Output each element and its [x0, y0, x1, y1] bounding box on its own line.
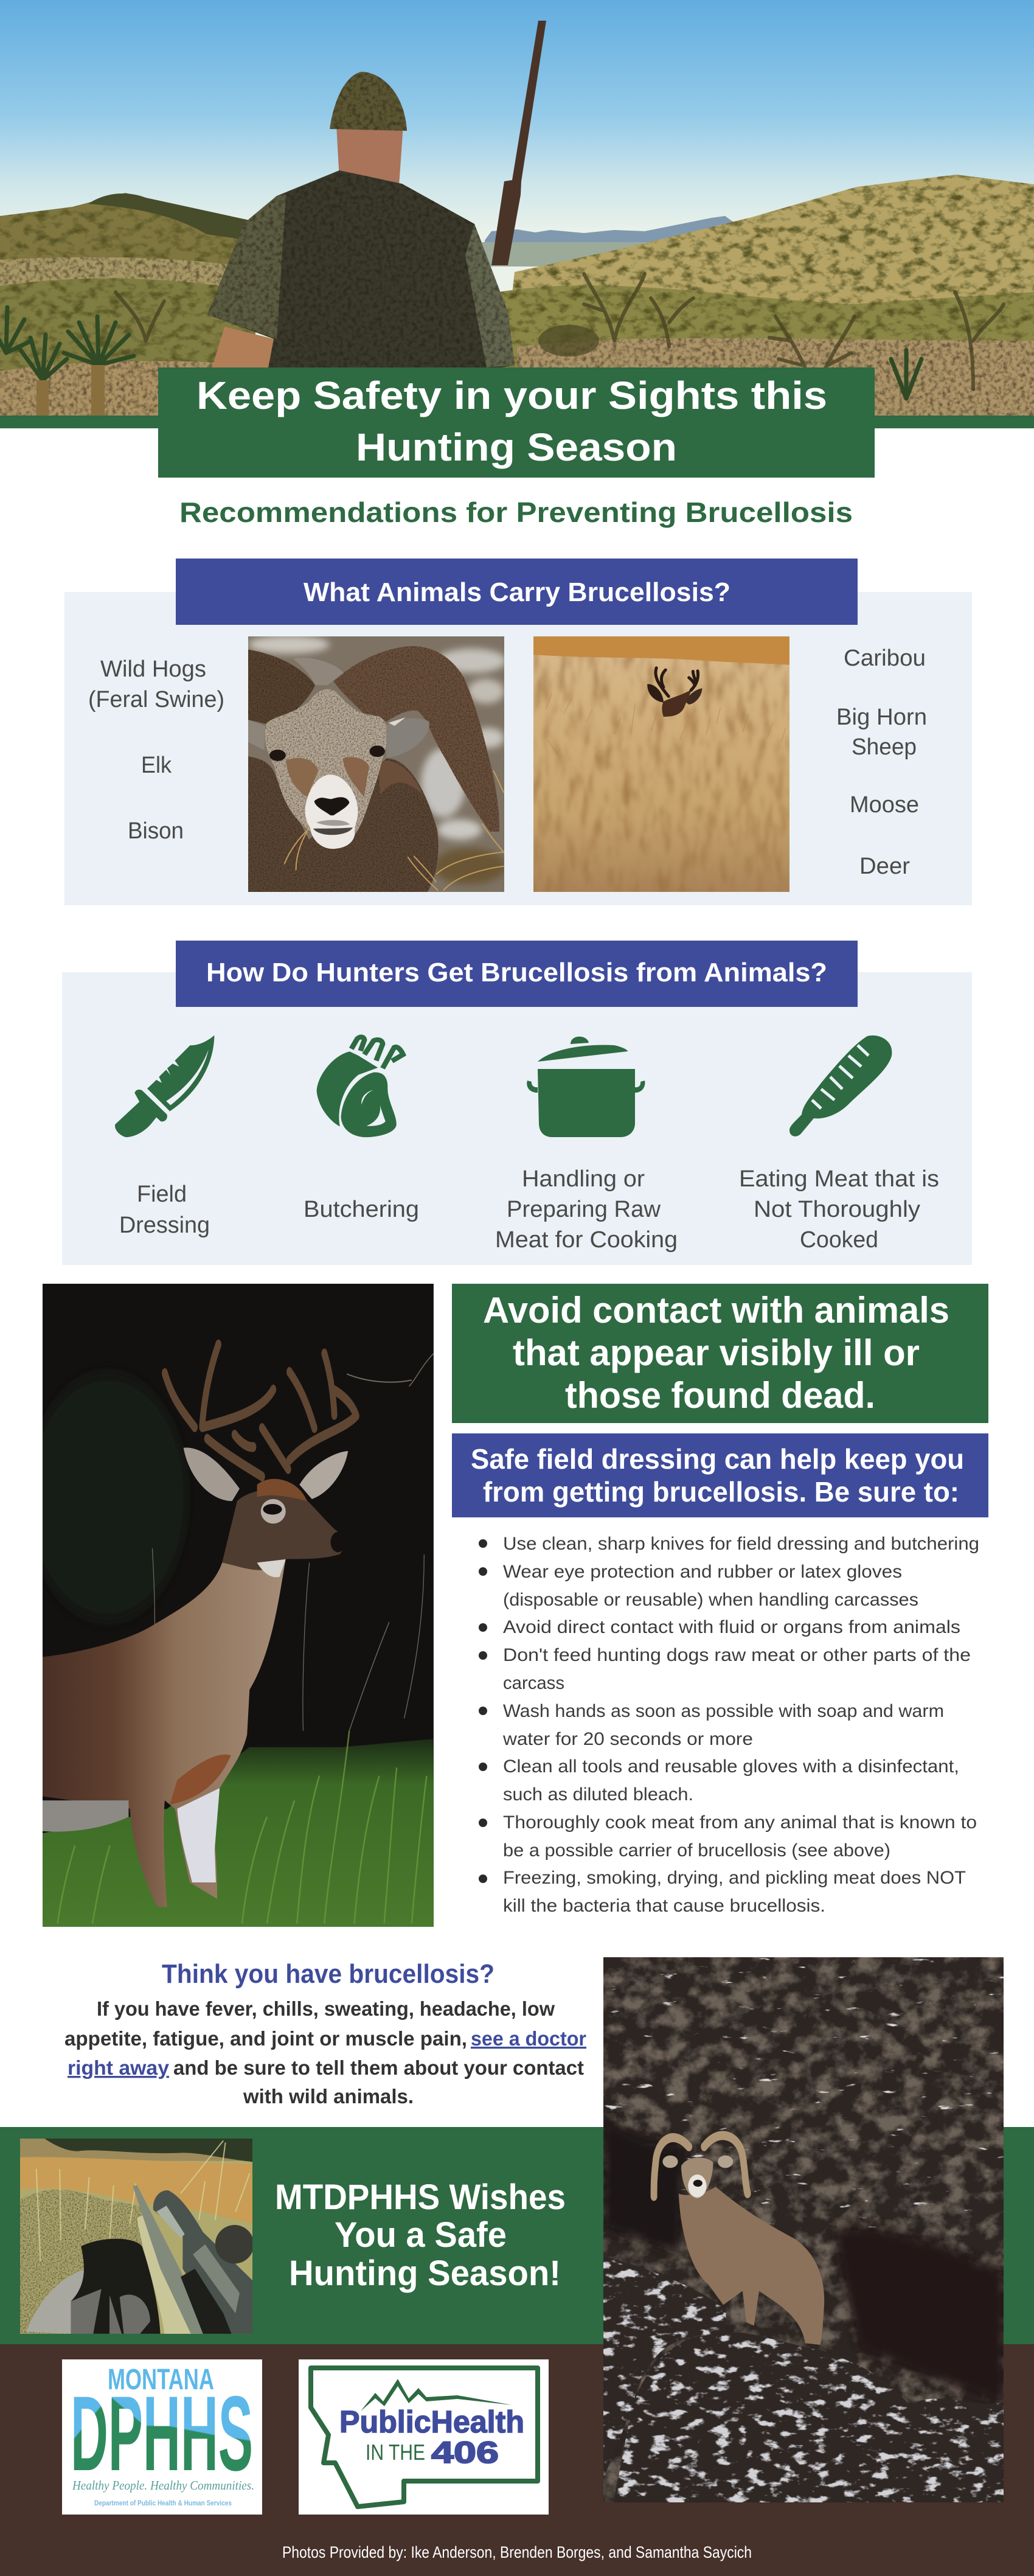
- label: eating undercooked meat: Cooked: [800, 1227, 878, 1253]
- logo: Public Health in the 406: IN THE: [366, 2440, 425, 2465]
- heading: what animals: [176, 559, 858, 625]
- text block: symptoms: [64, 1997, 586, 2108]
- heading: think you have brucellosis: Think you have brucellosis?: [162, 1959, 494, 1989]
- callout: avoid contact: [452, 1284, 988, 1423]
- title banner: Keep Safety in your Sights this: [196, 374, 827, 417]
- label: field dressing: [119, 1182, 210, 1238]
- bullet list: field dressing tips: Avoid direct contact with fluid or organs from animals: [503, 1617, 960, 1637]
- brown footer band: [0, 2344, 1034, 2576]
- callout: avoid contact: Avoid contact with animals: [483, 1290, 949, 1331]
- rifle: [491, 21, 546, 265]
- bullet list: field dressing tips: Don't feed hunting dogs raw meat or other parts of the: [503, 1645, 971, 1665]
- left animal list: [88, 656, 224, 844]
- bullet list: field dressing tips: water for 20 seconds or more: [502, 1729, 753, 1749]
- right animal list: Moose: [850, 792, 919, 818]
- callout: safe field dressing: [452, 1433, 988, 1517]
- left animal list: (Feral Swine): [88, 687, 224, 712]
- text: MTDPHHS wishes: Hunting Season!: [289, 2254, 561, 2293]
- green stripe: [0, 416, 1034, 428]
- photo: rifle and pack in field: [20, 2139, 254, 2334]
- bullet list: field dressing tips: Freezing, smoking, drying, and pickling meat does NOT: [503, 1868, 966, 1888]
- hunter figure: [207, 72, 515, 371]
- right animal list: Sheep: [852, 734, 917, 760]
- hero photo: hunter with rifle in desert hills: [0, 0, 1034, 416]
- logo: Public Health in the 406: [299, 2359, 549, 2515]
- label: handling raw meat: Preparing Raw: [507, 1197, 661, 1222]
- photo credits: Photos Provided by: Ike Anderson, Brenden Borges, and Samantha Saycich: [282, 2543, 752, 2561]
- text block: symptoms: with wild animals.: [243, 2085, 414, 2108]
- callout: avoid contact: that appear visibly ill or: [513, 1332, 920, 1373]
- text: MTDPHHS wishes: You a Safe: [335, 2215, 507, 2255]
- subtitle: Recommendations for Preventing Brucellosis: [179, 496, 853, 528]
- icon: cooking pot: [527, 1037, 645, 1137]
- right animal list: Deer: [859, 854, 910, 879]
- right animal list: Big Horn: [836, 705, 927, 730]
- right animal list: [836, 646, 927, 879]
- right animal list: Caribou: [844, 646, 926, 671]
- heading: what animals: What Animals Carry Brucellosis?: [304, 577, 730, 607]
- bullet list: field dressing tips: (disposable or reusable) when handling carcasses: [503, 1590, 918, 1610]
- logo: Montana DPHHS: Healthy People. Healthy Communities.: [72, 2478, 254, 2493]
- logo: Montana DPHHS: MONTANA: [108, 2364, 214, 2396]
- bullet list: field dressing tips: be a possible carrier of brucellosis (see above): [503, 1840, 890, 1861]
- bullet list: field dressing tips: [479, 1534, 979, 1916]
- left animal list: Bison: [128, 818, 184, 844]
- label: eating undercooked meat: Not Thoroughly: [754, 1197, 920, 1222]
- label: eating undercooked meat: Eating Meat that is: [739, 1166, 939, 1192]
- text block: symptoms: right away: [68, 2056, 170, 2079]
- bullet list: field dressing tips: Use clean, sharp knives for field dressing and butchering: [503, 1534, 979, 1554]
- text block: symptoms: appetite, fatigue, and joint or muscle pain,: [64, 2027, 467, 2050]
- bullet list: field dressing tips: kill the bacteria that cause brucellosis.: [503, 1896, 825, 1916]
- green band: [0, 2127, 1034, 2344]
- text block: symptoms: and be sure to tell them about your contact: [173, 2056, 584, 2079]
- text: MTDPHHS wishes: [275, 2177, 566, 2293]
- logo: Montana DPHHS: [62, 2359, 262, 2515]
- callout: safe field dressing: Safe field dressing can help keep you: [471, 1443, 964, 1475]
- bullet list: field dressing tips: Clean all tools and reusable gloves with a disinfectant,: [503, 1756, 959, 1777]
- logo: Montana DPHHS: Department of Public Health & Human Services: [94, 2499, 232, 2507]
- bullet list: field dressing tips: Thoroughly cook meat from any animal that is known to: [503, 1812, 977, 1833]
- label: eating undercooked meat: [739, 1166, 939, 1253]
- logo: Montana DPHHS: DPHHS: [71, 2375, 253, 2493]
- panel: what animals carry brucellosis: [64, 559, 972, 905]
- left animal list: Wild Hogs: [100, 656, 206, 682]
- photo: bighorn ram on snowy rocks: [603, 1957, 1004, 2502]
- label: handling raw meat: Meat for Cooking: [495, 1227, 678, 1253]
- logo: Public Health in the 406: 406: [431, 2435, 499, 2470]
- text: MTDPHHS wishes: MTDPHHS Wishes: [275, 2177, 566, 2217]
- bullet list: field dressing tips: Wash hands as soon as possible with soap and warm: [503, 1701, 944, 1721]
- text block: symptoms: see a doctor: [471, 2027, 586, 2050]
- title banner: [158, 367, 875, 478]
- label: handling raw meat: [495, 1166, 678, 1253]
- panel: how hunters get brucellosis: [62, 941, 972, 1265]
- label: field dressing: Dressing: [119, 1213, 210, 1238]
- callout: safe field dressing: from getting brucellosis. Be sure to:: [483, 1476, 959, 1508]
- icon: cut of meat: [317, 1037, 403, 1137]
- callout: avoid contact: those found dead.: [565, 1375, 875, 1416]
- heading: how hunters: How Do Hunters Get Brucellosis from Animals?: [206, 958, 827, 987]
- photo: deer antlers in wheat field: [533, 636, 789, 893]
- bullet list: field dressing tips: carcass: [503, 1673, 564, 1693]
- photo: white-tailed buck: [27, 1284, 434, 1927]
- icon: meat thermometer: [789, 1036, 892, 1137]
- heading: how hunters: [176, 941, 858, 1007]
- title banner: Hunting Season: [356, 425, 677, 469]
- text block: symptoms: If you have fever, chills, sweating, headache, low: [97, 1997, 555, 2020]
- bullet list: field dressing tips: Wear eye protection and rubber or latex gloves: [503, 1562, 902, 1582]
- logo: Public Health in the 406: PublicHealth: [339, 2404, 524, 2439]
- label: butchering: Butchering: [304, 1197, 419, 1222]
- bullet list: field dressing tips: such as diluted bleach.: [503, 1784, 693, 1805]
- label: field dressing: Field: [137, 1182, 187, 1207]
- icon: knife: [115, 1036, 214, 1137]
- left animal list: Elk: [141, 753, 172, 778]
- photo: big horn ram close-up: [248, 635, 506, 893]
- label: handling raw meat: Handling or: [522, 1166, 645, 1192]
